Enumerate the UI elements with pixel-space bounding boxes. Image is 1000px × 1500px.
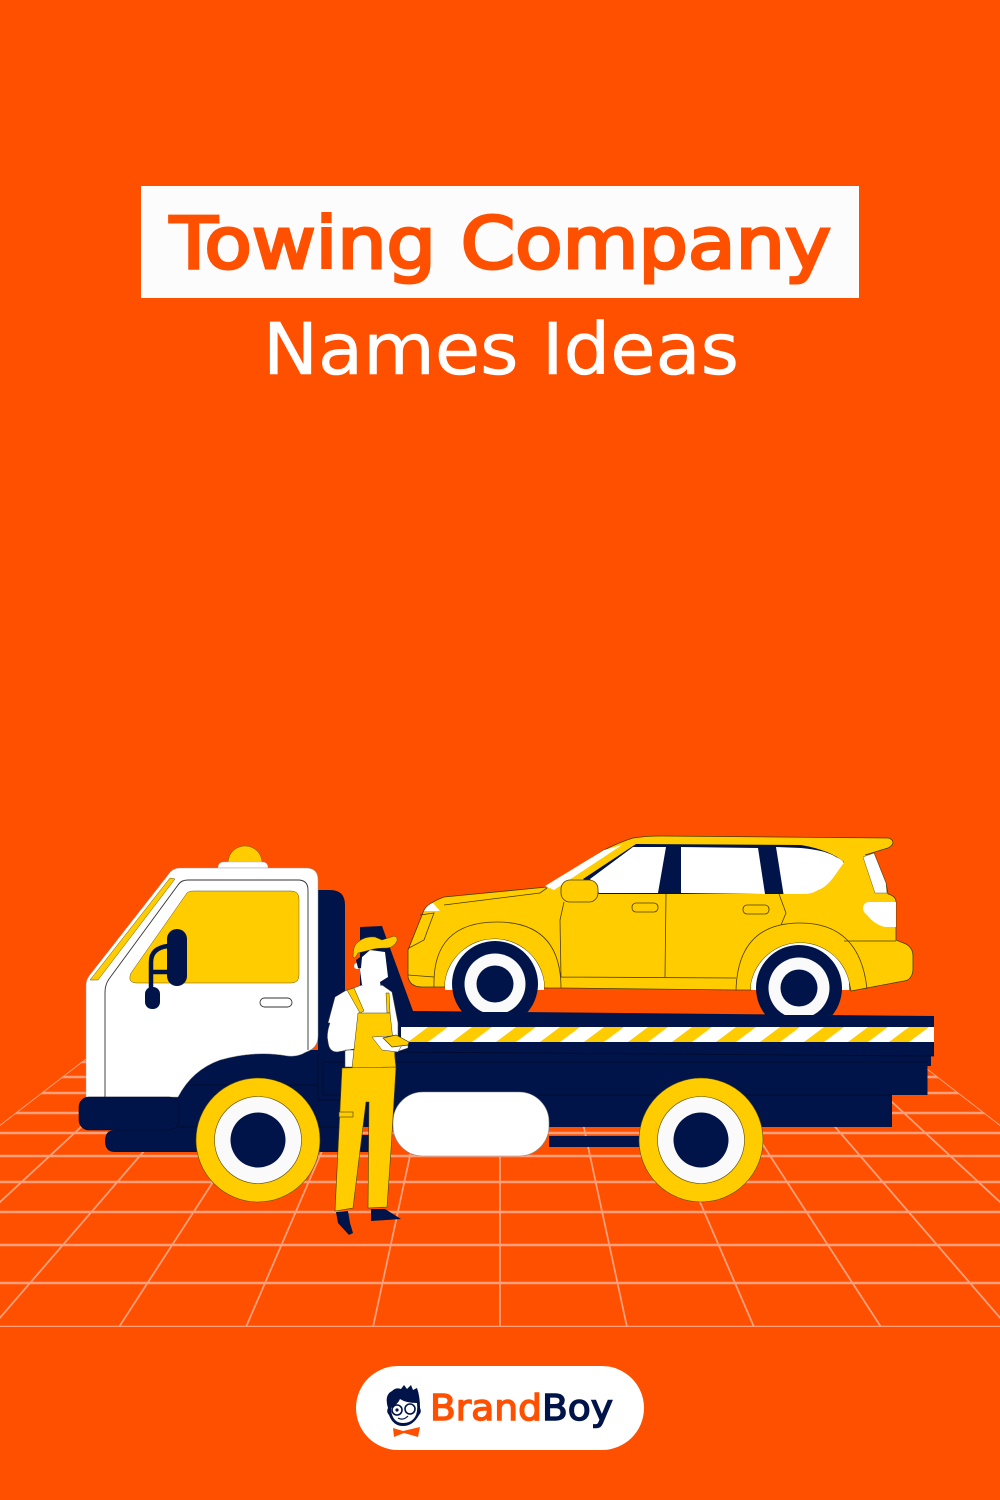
overall straps and bib (347, 988, 396, 1068)
cab body (86, 868, 318, 1097)
subtitle: Names Ideas (263, 308, 739, 391)
beacon light (218, 846, 268, 868)
cab window (130, 891, 299, 983)
title: highlighted heading: Towing Company (169, 202, 831, 285)
door handle (260, 998, 292, 1007)
logo mascot face (387, 1385, 421, 1437)
worker shoes (336, 1209, 401, 1235)
car body (408, 836, 913, 991)
hazard stripe (401, 1027, 934, 1042)
headlight (424, 903, 440, 911)
logo wordmark: BrandBoy (430, 1388, 613, 1429)
car wheels (452, 941, 842, 1015)
bumper (79, 1097, 179, 1130)
BrandBoy logo pill (356, 1366, 644, 1450)
trouser pocket (339, 1112, 353, 1117)
white fuel tank (393, 1092, 549, 1156)
worker shirt and arms (327, 985, 408, 1067)
front bed wheel (639, 1078, 763, 1202)
yellow car on flatbed (408, 836, 913, 1031)
white wheel arches (445, 939, 849, 990)
side mirror (145, 929, 187, 1009)
car door handles (632, 903, 769, 914)
worker figure (327, 936, 409, 1235)
overall trousers (335, 1067, 396, 1211)
perspective floor grid (0, 1058, 1000, 1327)
car side mirror (561, 880, 598, 902)
worker hand and phone (372, 1035, 409, 1052)
truck chassis and flatbed (105, 890, 934, 1152)
windows (545, 844, 887, 894)
car body lines (408, 888, 896, 990)
tow truck (79, 846, 934, 1202)
worker head (354, 950, 388, 990)
title: highlighted heading (141, 186, 859, 298)
tail light (863, 902, 896, 927)
windshield yellow strip (90, 878, 175, 980)
worker cap (353, 936, 397, 958)
door outline (105, 880, 308, 1097)
rear wheel (196, 1078, 320, 1202)
